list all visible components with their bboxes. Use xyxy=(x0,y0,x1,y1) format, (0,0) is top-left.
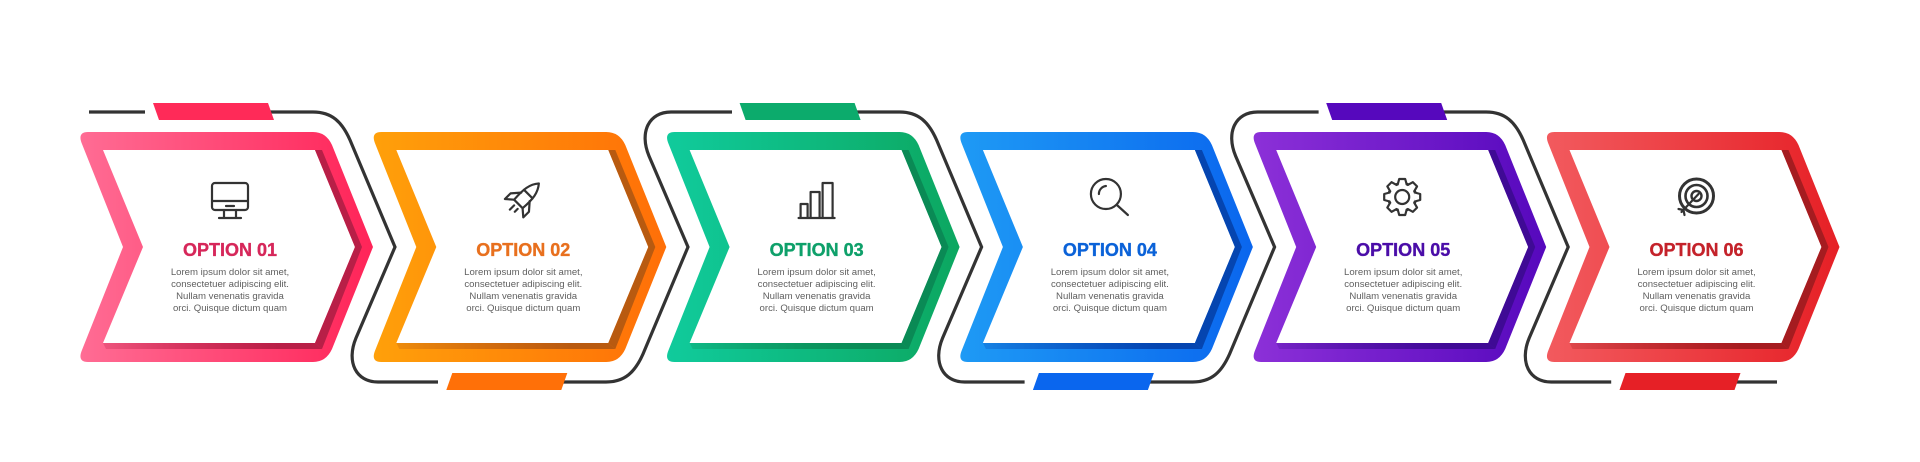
tab xyxy=(446,373,567,390)
body text: Lorem ipsum dolor sit amet, xyxy=(464,267,582,278)
inner shadow right xyxy=(315,150,362,349)
body text: Nullam venenatis gravida xyxy=(176,291,285,302)
body text: Lorem ipsum dolor sit amet, xyxy=(1637,267,1756,278)
panel: option 03 xyxy=(667,103,960,362)
connector line xyxy=(89,112,1777,382)
body text xyxy=(1051,267,1169,314)
inner shadow right xyxy=(1488,150,1535,349)
arrow frame xyxy=(80,132,373,362)
panel: option 02 xyxy=(374,132,666,390)
inner shadow bottom xyxy=(983,343,1202,349)
inner shadow bottom xyxy=(396,343,615,349)
inner card xyxy=(983,150,1235,343)
body text: consectetuer adipiscing elit. xyxy=(1638,279,1755,290)
heading: OPTION 05 xyxy=(1356,240,1450,260)
body text: Lorem ipsum dolor sit amet, xyxy=(1344,267,1462,278)
panel: option 04 xyxy=(960,132,1253,390)
body text: orci. Quisque dictum quam xyxy=(1053,303,1167,314)
body text: orci. Quisque dictum quam xyxy=(173,303,287,314)
icon: rocket xyxy=(502,174,548,220)
body text: orci. Quisque dictum quam xyxy=(466,303,580,314)
body text: consectetuer adipiscing elit. xyxy=(758,279,876,290)
inner card xyxy=(1276,150,1528,343)
body text xyxy=(757,267,876,314)
icon: monitor xyxy=(212,183,248,218)
body text: Lorem ipsum dolor sit amet, xyxy=(757,267,876,278)
body text: Lorem ipsum dolor sit amet, xyxy=(1051,267,1169,278)
body text xyxy=(1344,267,1462,314)
arrow frame xyxy=(374,132,666,362)
inner shadow right xyxy=(608,150,655,349)
body text: Lorem ipsum dolor sit amet, xyxy=(171,267,289,278)
heading: OPTION 02 xyxy=(476,240,570,260)
body text: orci. Quisque dictum quam xyxy=(1639,303,1754,314)
icon: target xyxy=(1678,179,1714,215)
inner card xyxy=(690,150,942,343)
body text: consectetuer adipiscing elit. xyxy=(1051,279,1169,290)
body text: Nullam venenatis gravida xyxy=(763,291,871,302)
panel: option 05 xyxy=(1254,103,1546,362)
arrow frame xyxy=(667,132,960,362)
panel: option 06 xyxy=(1547,132,1840,390)
icon: gear xyxy=(1384,179,1420,215)
inner shadow bottom xyxy=(1276,343,1495,349)
inner shadow right xyxy=(902,150,949,349)
tab xyxy=(1620,373,1740,390)
heading: OPTION 06 xyxy=(1649,240,1744,260)
tab xyxy=(1326,103,1447,120)
icon: bar chart xyxy=(799,183,835,218)
inner shadow bottom xyxy=(690,343,909,349)
body text: consectetuer adipiscing elit. xyxy=(171,279,289,290)
body text: consectetuer adipiscing elit. xyxy=(464,279,582,290)
inner shadow right xyxy=(1195,150,1242,349)
body text: Nullam venenatis gravida xyxy=(1349,291,1458,302)
body text: consectetuer adipiscing elit. xyxy=(1344,279,1462,290)
inner card xyxy=(396,150,648,343)
tab xyxy=(1033,373,1154,390)
inner shadow right xyxy=(1782,150,1828,349)
heading: OPTION 03 xyxy=(770,240,864,260)
body text: Nullam venenatis gravida xyxy=(1056,291,1164,302)
body text xyxy=(1637,267,1756,314)
arrow frame xyxy=(960,132,1253,362)
body text: orci. Quisque dictum quam xyxy=(760,303,874,314)
heading: OPTION 01 xyxy=(183,240,277,260)
tab xyxy=(153,103,274,120)
inner card xyxy=(1570,150,1822,343)
heading: OPTION 04 xyxy=(1063,240,1157,260)
body text xyxy=(464,267,582,314)
arrow frame xyxy=(1254,132,1546,362)
icon: magnifier xyxy=(1091,179,1128,215)
tab xyxy=(740,103,861,120)
body text xyxy=(171,267,289,314)
panel: option 01 xyxy=(80,103,373,362)
inner card xyxy=(103,150,355,343)
inner shadow bottom xyxy=(103,343,322,349)
body text: Nullam venenatis gravida xyxy=(1643,291,1751,302)
body text: orci. Quisque dictum quam xyxy=(1346,303,1460,314)
inner shadow bottom xyxy=(1570,343,1788,349)
arrow frame xyxy=(1547,132,1840,362)
body text: Nullam venenatis gravida xyxy=(469,291,578,302)
